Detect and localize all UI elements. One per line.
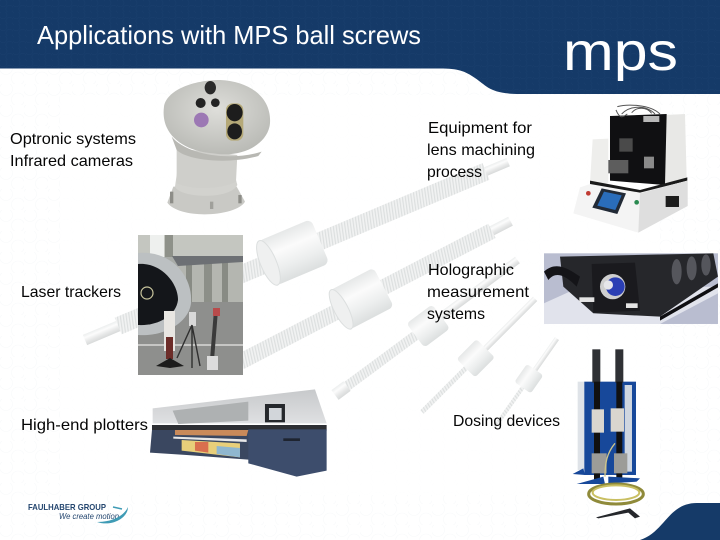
photo: holographic measurement system — [544, 253, 718, 324]
photo: dosing device — [573, 349, 643, 518]
ball screws illustration — [76, 140, 565, 433]
photo: high-end plotter — [150, 389, 327, 477]
ball screw 5 — [487, 333, 565, 433]
label: holographic measurement systems: measurement — [427, 284, 530, 301]
tracker 3 — [207, 308, 220, 370]
logo: mps: mps — [563, 22, 678, 82]
photo: laser trackers with jet engine — [138, 235, 243, 375]
label: equipment for lens machining process: process — [427, 164, 482, 181]
ball screw 2 — [230, 202, 521, 382]
footer logo: Faulhaber Group: We create motion — [59, 512, 120, 521]
footer logo: Faulhaber Group: FAULHABER GROUP — [28, 502, 106, 512]
label: optronic systems: Optronic systems — [10, 131, 136, 148]
label: holographic measurement systems — [427, 262, 530, 323]
header band — [0, 0, 720, 94]
label: holographic measurement systems: systems — [427, 306, 485, 323]
tracker 1 — [156, 311, 184, 368]
tracker 2 — [177, 312, 200, 368]
label: infrared cameras: Infrared cameras — [10, 153, 133, 170]
ball screw 1 — [76, 140, 517, 362]
ball screw 3 — [326, 248, 526, 407]
label: equipment for lens machining process: Equipment for — [428, 120, 533, 137]
label: equipment for lens machining process: lens machining — [427, 142, 535, 159]
label: equipment for lens machining process — [427, 120, 535, 181]
footer logo: Faulhaber Group — [28, 502, 128, 523]
label: dosing devices: Dosing devices — [453, 413, 560, 430]
photo: lens machining equipment — [573, 105, 688, 233]
ball screw 4 — [413, 290, 544, 421]
label: holographic measurement systems: Holographic — [428, 262, 514, 279]
title: Applications with MPS ball screws — [37, 20, 421, 50]
label: laser trackers: Laser trackers — [21, 284, 121, 301]
photo: optronic camera turret — [164, 80, 270, 214]
corner shape bottom right — [640, 503, 720, 540]
label: high-end plotters: High-end plotters — [21, 417, 148, 434]
